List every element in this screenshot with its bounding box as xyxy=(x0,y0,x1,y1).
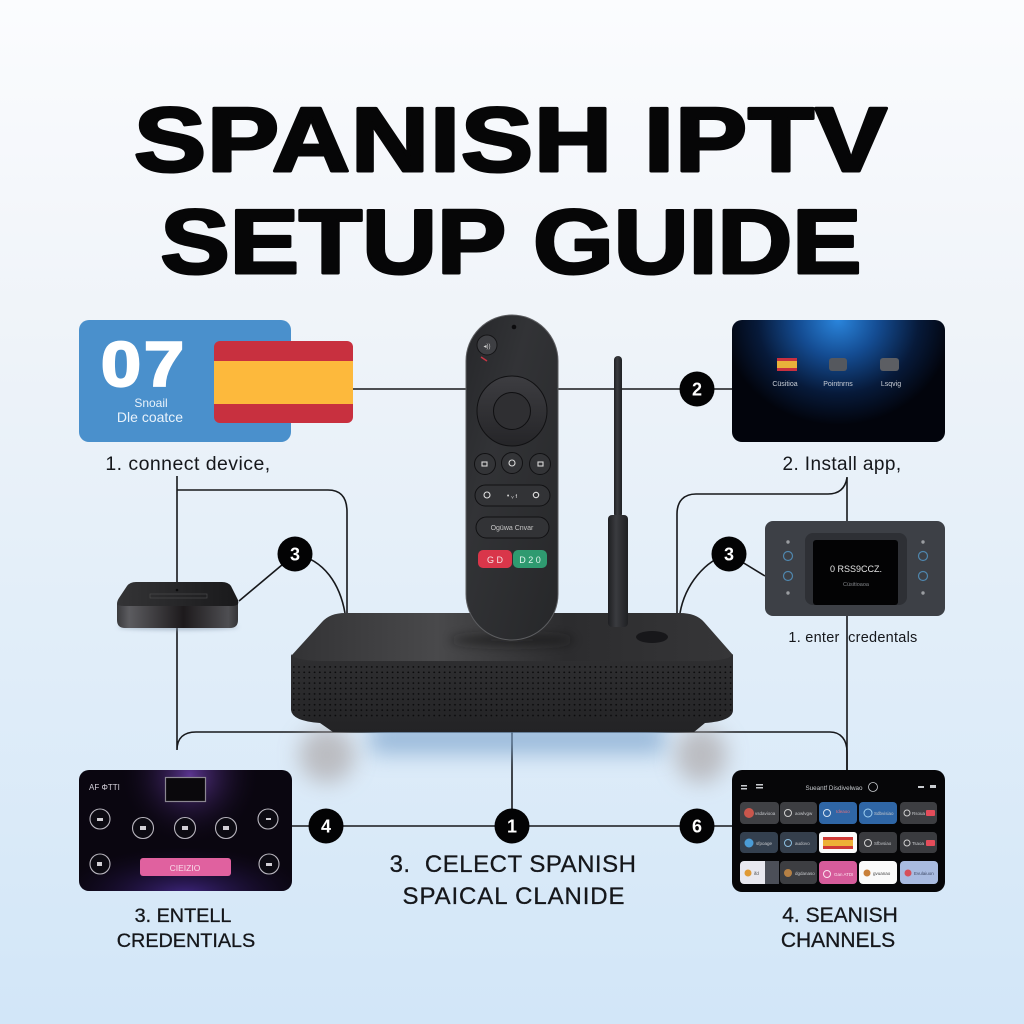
label: select spanish channel caption: 3. CELECT SPANISH xyxy=(390,851,636,878)
tile logos xyxy=(744,808,935,878)
title xyxy=(134,90,888,293)
step badge 3 left xyxy=(278,536,312,572)
pill button row xyxy=(475,485,550,506)
panel: install app screen xyxy=(732,320,945,442)
green button xyxy=(513,550,547,568)
step badge 2 xyxy=(680,372,714,406)
step badge 3 right xyxy=(712,536,746,572)
channel tiles xyxy=(740,802,938,884)
screen labels xyxy=(772,381,901,388)
step badge 6: 6 xyxy=(692,816,702,836)
connector lines xyxy=(177,389,847,826)
green button: D 2 0 xyxy=(519,555,541,565)
card small text: Dle coatce xyxy=(117,409,183,425)
label: spanish channels caption xyxy=(781,904,898,952)
icon: small flag xyxy=(777,358,797,371)
step badge 3 left: 3 xyxy=(290,544,300,564)
remote shadow xyxy=(450,634,574,646)
label: select spanish channel caption xyxy=(390,851,636,910)
tile labels: Sdbvisiao xyxy=(874,811,894,816)
step badge 1 xyxy=(494,808,530,844)
tile labels: ifd xyxy=(754,871,759,876)
card small text: Snoail xyxy=(134,396,168,410)
panel: enter credentials screen xyxy=(79,770,292,891)
screen labels: Cüsitioa xyxy=(772,381,798,388)
label: enter credentials caption: CREDENTIALS xyxy=(117,930,255,952)
tile labels: Sfbvsiao xyxy=(874,841,892,846)
step badge 4: 4 xyxy=(321,816,331,836)
title: SPANISH IPTV xyxy=(134,90,888,191)
pill label button: Ogüwa Cnvar xyxy=(491,525,534,532)
big number 07: 07 xyxy=(101,330,187,400)
d-pad xyxy=(477,376,547,446)
screen labels: Pointnrns xyxy=(823,381,853,388)
tile labels: Evulaiuon xyxy=(914,871,934,876)
tile labels: audovo xyxy=(795,841,810,846)
step badge 4 xyxy=(308,808,344,844)
pink button: CIEIZIO xyxy=(170,863,201,873)
red button: G D xyxy=(487,555,503,565)
panel: credentials device: 0 RSS9CCZ. xyxy=(830,564,882,574)
label: spanish channels caption: CHANNELS xyxy=(781,929,895,952)
tile labels: aowlvgw xyxy=(795,811,813,816)
icon: app tile xyxy=(880,358,899,371)
label: spanish channels caption: 4. SEANISH xyxy=(782,904,898,927)
panel: credentials device xyxy=(765,521,945,616)
step badge 2: 2 xyxy=(692,380,702,400)
icon buttons xyxy=(90,809,279,874)
tile labels: Tsaoa xyxy=(912,841,925,846)
tile labels: dgdanaso xyxy=(795,871,815,876)
card small text xyxy=(117,396,183,425)
pill label button xyxy=(476,517,549,538)
red button xyxy=(478,550,512,568)
label: install app: 2. Install app, xyxy=(782,454,902,475)
tile labels: gvuanao xyxy=(873,871,891,876)
round buttons xyxy=(474,452,550,474)
screen header xyxy=(741,782,936,792)
tile labels: vsdaviooa xyxy=(755,811,776,816)
icon: small set-top box xyxy=(117,582,238,630)
step badge 1: 1 xyxy=(507,816,517,836)
glow beneath box xyxy=(299,722,727,783)
label: enter credentials caption: 3. ENTELL xyxy=(135,905,231,927)
tile labels: Rsoua xyxy=(912,811,926,816)
tile labels: Ideaoo xyxy=(836,809,850,814)
step badge 6 xyxy=(680,808,714,844)
screen labels: Lsqvig xyxy=(881,381,901,388)
pink button xyxy=(140,858,231,876)
panel: channel grid screen xyxy=(732,770,945,892)
panel: connect device card xyxy=(79,320,353,442)
main set-top box xyxy=(291,356,733,732)
tile labels: sfpoage xyxy=(756,841,773,846)
tile flag xyxy=(823,837,853,849)
label: enter credentials: 1. enter credentals xyxy=(788,630,918,646)
panel: credentials device: Cüsitioaoa xyxy=(843,582,870,588)
button on box xyxy=(636,631,668,643)
label: select spanish channel caption: SPAICAL CLANIDE xyxy=(403,883,625,910)
label: connect device: 1. connect device, xyxy=(105,453,271,475)
label: enter credentials caption xyxy=(117,905,255,952)
title: SETUP GUIDE xyxy=(161,191,861,293)
screen header: Sueantf Disdivelwao xyxy=(805,785,863,792)
step badge 3 right: 3 xyxy=(724,544,734,564)
screen preview xyxy=(166,778,206,802)
tile labels: Gan ATDI xyxy=(834,872,853,877)
panel: enter credentials screen: AF ΦTTI xyxy=(89,783,120,792)
icon: remote control: ◂)) xyxy=(483,344,491,350)
tile labels xyxy=(754,809,934,877)
icon: remote control xyxy=(466,315,558,640)
indicator lights xyxy=(784,552,928,580)
pill button row: • ᵥ ᵻ xyxy=(507,493,518,500)
antenna stand xyxy=(608,356,628,627)
icon: Spanish flag xyxy=(214,341,353,423)
icon: app tile xyxy=(829,358,847,371)
